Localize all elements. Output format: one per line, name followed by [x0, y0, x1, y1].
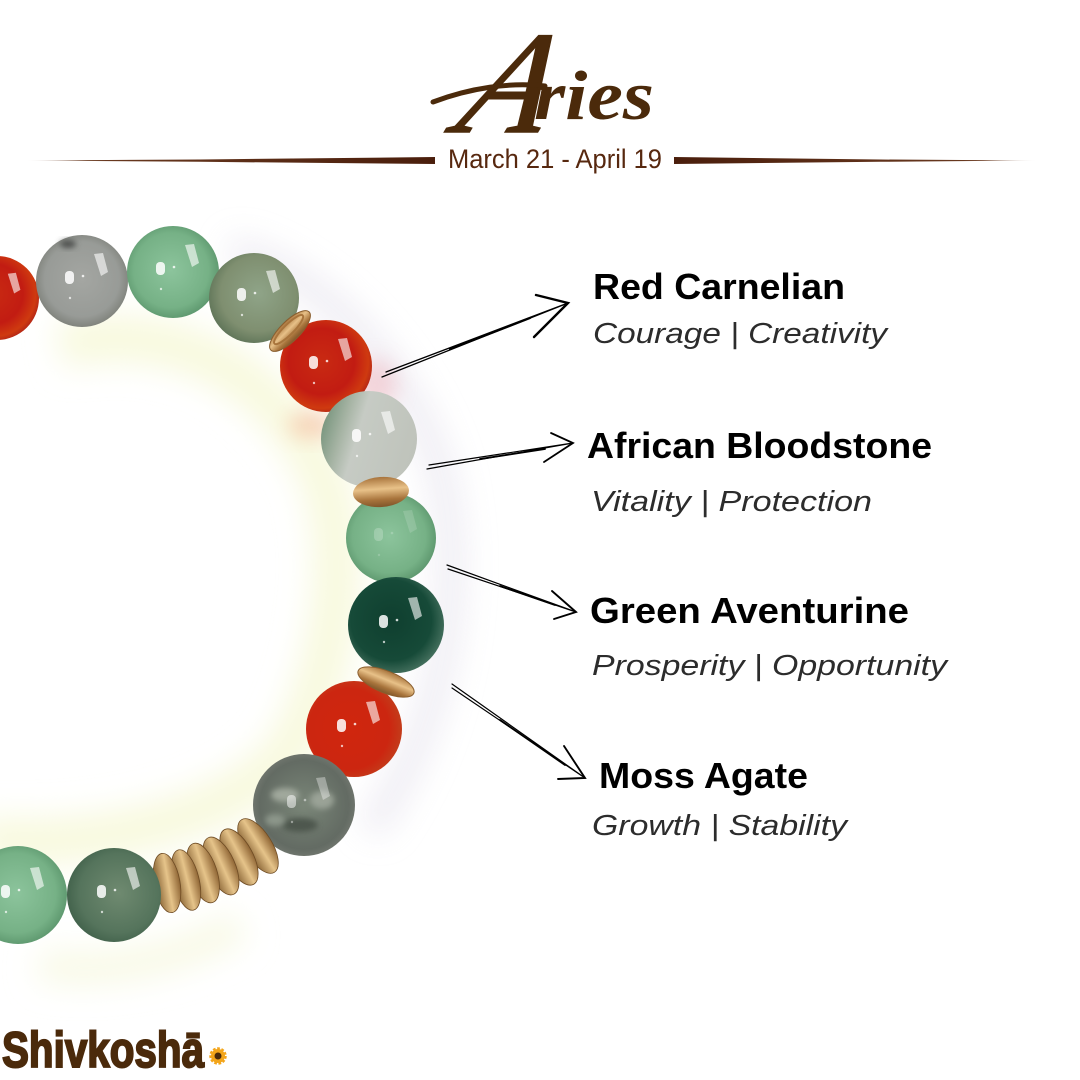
logo	[2, 1022, 225, 1078]
bead: green aventurine	[127, 226, 219, 318]
icon: sunflower	[211, 1049, 225, 1063]
bead: green aventurine	[346, 493, 436, 583]
bead: red far left	[0, 256, 39, 340]
bead: dark grey stone	[253, 754, 355, 856]
ring spacer	[352, 475, 410, 509]
bead: moss agate lower left	[67, 848, 161, 942]
bracelet shadow and glow	[0, 250, 451, 968]
label: green aventurine: Green Aventurine	[590, 590, 909, 631]
rule right	[674, 157, 1038, 164]
arrow: moss agate	[452, 684, 585, 779]
title	[431, 2, 654, 164]
bead: grey	[36, 235, 128, 327]
date range: March 21 - April 19	[448, 144, 662, 174]
bead: moss agate	[348, 577, 444, 673]
logo wordmark: Shivkoshā	[2, 1022, 205, 1078]
ring spacer	[264, 305, 316, 357]
bead: red carnelian lower	[306, 681, 402, 777]
gold spacer stack	[149, 812, 286, 915]
arrow: african bloodstone	[427, 433, 573, 469]
label: african bloodstone	[587, 425, 932, 518]
bead: olive	[209, 253, 299, 343]
arrow: red carnelian	[382, 295, 568, 377]
title letters ries: ries	[534, 58, 654, 135]
label: red carnelian: Red Carnelian	[593, 266, 845, 307]
ring spacer	[354, 661, 418, 703]
label: green aventurine	[590, 590, 949, 682]
bracelet	[0, 226, 444, 944]
label: moss agate: Growth | Stability	[592, 810, 849, 842]
bead: african bloodstone	[321, 391, 417, 487]
label: red carnelian: Courage | Creativity	[593, 318, 889, 350]
title flourish	[433, 85, 545, 102]
label: african bloodstone: African Bloodstone	[587, 425, 932, 466]
title letter A: A	[431, 2, 592, 164]
label: green aventurine: Prosperity | Opportunity	[592, 650, 949, 682]
bead: red carnelian	[280, 320, 372, 412]
label: african bloodstone: Vitality | Protection	[591, 486, 872, 518]
rule left	[25, 157, 435, 164]
arrow: green aventurine	[447, 565, 576, 619]
label: red carnelian	[593, 266, 889, 350]
label: moss agate: Moss Agate	[599, 755, 808, 796]
label: moss agate	[592, 755, 849, 842]
bead: green aventurine lower left	[0, 846, 67, 944]
